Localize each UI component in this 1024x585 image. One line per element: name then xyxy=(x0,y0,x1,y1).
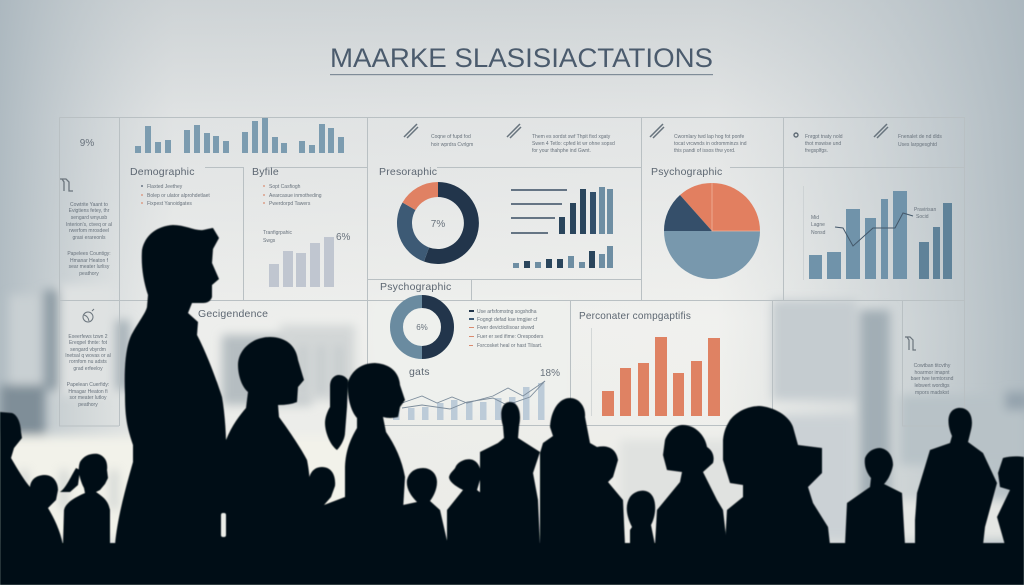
note text: tocat vrcwnds in odromminzs ind xyxy=(674,141,747,147)
left label: Mid xyxy=(811,215,819,221)
column text: peathory xyxy=(79,271,99,277)
note text: Fnenalet de nd dlds xyxy=(898,134,942,140)
column text: rwerfom mrosdeel xyxy=(69,228,109,234)
legend: Fsrcosket heal or hast Tilsart. xyxy=(477,343,542,349)
panel: Presoraphic xyxy=(379,166,613,268)
trend lines xyxy=(402,381,545,409)
note text xyxy=(911,363,954,396)
panel: right notes xyxy=(905,337,954,396)
panel: gats trend xyxy=(393,366,560,420)
icon: paperclip xyxy=(650,124,664,138)
silhouette: woman right xyxy=(845,448,905,545)
icon: paperclip xyxy=(874,124,888,138)
column text: Evigtiens fetey, thr xyxy=(69,208,110,214)
bar chart: upper xyxy=(559,187,613,234)
bars xyxy=(809,191,952,279)
right label xyxy=(914,207,936,220)
bar chart: orange xyxy=(602,337,720,416)
donut chart: 7% xyxy=(404,190,471,256)
heading: gats xyxy=(409,366,430,378)
panel: lower-left notes xyxy=(65,309,111,408)
panel: top notes row xyxy=(404,124,942,154)
bullet list: Bolep or ulator alprohdetlaet xyxy=(147,193,210,199)
note text: Uses larpgesghtd xyxy=(898,142,937,148)
silhouette: tall man xyxy=(115,225,228,545)
donut value: 7% xyxy=(431,219,445,230)
silhouette: large head person xyxy=(723,406,830,545)
note text: mpors madskst xyxy=(915,390,950,396)
column text xyxy=(66,202,112,277)
right label: Socid xyxy=(916,214,929,220)
silhouette: small person xyxy=(403,468,448,545)
bar chart: byfile xyxy=(269,237,334,287)
heading: Presoraphic xyxy=(379,166,437,178)
icon: gear xyxy=(794,133,798,137)
icon: paperclip xyxy=(507,124,521,138)
left label: Lagne xyxy=(811,222,825,228)
note text: hoir wprdra Cvrlgm xyxy=(431,142,473,148)
note text: Hmagar Heaton fi xyxy=(68,389,108,395)
chart caption: Tranfigrpahic xyxy=(263,230,292,236)
silhouette: man right xyxy=(915,408,997,545)
bullet list: Flaxted Jeethey xyxy=(147,184,183,190)
left label: Nonsd xyxy=(811,230,826,236)
legend: Fwer devicticilisoar siwwd xyxy=(477,325,534,331)
note text xyxy=(532,134,615,154)
bar chart: top strip xyxy=(135,118,344,153)
trend line xyxy=(835,213,913,246)
axis xyxy=(802,186,804,280)
blurred city skyline xyxy=(0,285,1024,540)
heading: Gecigendence: Gecigendence xyxy=(198,308,268,320)
note text: Coqne of fupd fod xyxy=(431,134,471,140)
note text: Exeerfews tzwn 2 xyxy=(68,334,108,340)
silhouette: far-left man and child xyxy=(0,412,63,545)
note text: this pandi of issos thw yord. xyxy=(674,148,735,154)
left label xyxy=(811,215,826,236)
icon: paperclip xyxy=(404,124,418,138)
panel: Psychographic pie xyxy=(651,166,760,279)
panel: lower donut xyxy=(380,281,544,352)
heading: Perconater compgaptifis xyxy=(579,310,691,322)
silhouette: bun child xyxy=(447,459,493,545)
column text: Papelees Countigy: xyxy=(67,251,111,257)
panel: Demographic xyxy=(130,166,210,207)
gap between the two front figures xyxy=(221,513,226,537)
bullet list xyxy=(141,184,210,207)
metric: 6%: 6% xyxy=(336,232,351,243)
heading: Demographic xyxy=(130,166,195,178)
axis xyxy=(590,328,592,416)
note text: thot mswise und xyxy=(805,141,841,147)
note text: Cowtban titcvthy xyxy=(914,363,951,369)
silhouette: long-hair woman xyxy=(540,398,625,545)
heading: Psychographic xyxy=(651,166,722,178)
panel: Perconater compgaptifis xyxy=(579,310,720,416)
legend xyxy=(469,309,544,349)
silhouette: bun woman xyxy=(655,425,727,545)
silhouettes: crowd xyxy=(0,225,1024,585)
note text: sengard vbyrdm xyxy=(70,347,106,353)
legend: Fuer er sed ifime: Orespoders xyxy=(477,334,544,340)
title: MAARKE SLASISIACTATIONS xyxy=(330,43,713,73)
note text xyxy=(674,134,747,154)
right label: Pravirisan xyxy=(914,207,936,213)
column text: Cowtrite Yaant to xyxy=(70,202,108,208)
column text: grasi erareonls xyxy=(72,235,106,241)
note text: Cwornlary twd lap hog fot ponfe xyxy=(674,134,745,140)
legend: Use arfsfomstng sogshdha xyxy=(477,309,537,315)
icon: tab glyph xyxy=(905,337,916,350)
panel: top-left metric column xyxy=(60,138,112,277)
note text: Fnrgpt tnaty nold xyxy=(805,134,843,140)
bullet list: Sopt Casfiogh xyxy=(269,184,301,190)
panel: Byfile xyxy=(252,166,351,287)
panel: Byfile: Swgs xyxy=(263,238,276,244)
pale window stripes xyxy=(20,345,342,510)
note text: grad erfeeloy xyxy=(73,366,103,372)
legend: Fogngt defad kse tmgjier cf xyxy=(477,317,538,323)
note text xyxy=(65,334,111,408)
note text: Inetsal q wovas or al xyxy=(65,353,111,359)
heading: Psychographic xyxy=(380,281,451,293)
metric: 18%: 18% xyxy=(540,368,560,379)
note text: Swen 4 Tetlo: cpfed kt wr ohne sopsd xyxy=(532,141,615,147)
silhouette: ponytail woman xyxy=(325,363,405,545)
column text: sear meater lurlisy xyxy=(69,264,110,270)
bars xyxy=(393,383,544,420)
note text: fregsplfgs. xyxy=(805,148,828,154)
silhouette: child beside woman xyxy=(627,491,655,545)
silhouette: far-right person xyxy=(997,456,1024,545)
bullet list: Aearcasue inmotheding xyxy=(269,193,322,199)
column text: sengard wnyusb xyxy=(71,215,107,221)
note text: Ereqpel thnte: fot xyxy=(69,340,108,346)
ground band xyxy=(0,543,1024,585)
dashboard grid lines xyxy=(59,118,964,426)
note text xyxy=(431,134,473,148)
column text: Hmanar Heaton f xyxy=(70,258,109,264)
donut chart: 6% xyxy=(397,302,448,352)
note text: peathory xyxy=(78,402,98,408)
donut value: 6% xyxy=(416,323,428,332)
metric: 9%: 9% xyxy=(80,138,94,149)
panel: mixed bar and line chart xyxy=(804,186,952,280)
note text: baer twe temtorsnd xyxy=(911,376,954,382)
heading: Byfile xyxy=(252,166,279,178)
note text: Them es sordst swf Thpit fixd xgaty xyxy=(532,134,611,140)
icon: globe xyxy=(83,309,94,322)
note text xyxy=(898,134,942,148)
pie chart xyxy=(664,183,760,279)
note text xyxy=(805,134,843,154)
silhouette: man at centre xyxy=(480,402,540,545)
line list xyxy=(511,190,567,233)
note text: lebwert wordtgs xyxy=(914,383,950,389)
column text: Interion's, ctveq or al xyxy=(66,222,112,228)
note text: rornfom nu adsts xyxy=(69,359,107,365)
note text: for your thahphe ind Gwnt. xyxy=(532,148,591,154)
silhouette: ponytail child xyxy=(60,454,110,545)
bullet list: Fixpest Yanoidgates xyxy=(147,201,192,207)
icon: tab glyph xyxy=(60,179,73,191)
note text: Papelean Cuerfidy: xyxy=(67,382,109,388)
silhouette: second man xyxy=(226,337,312,545)
bar chart: lower xyxy=(513,246,613,268)
bullet list: Pwerdorpd Tawers xyxy=(269,201,311,207)
note text: hoarmor imapnt xyxy=(914,370,950,376)
note text: sor meater lutloy xyxy=(70,395,107,401)
silhouette: small child centre-left xyxy=(308,467,350,545)
bullet list xyxy=(263,184,322,207)
